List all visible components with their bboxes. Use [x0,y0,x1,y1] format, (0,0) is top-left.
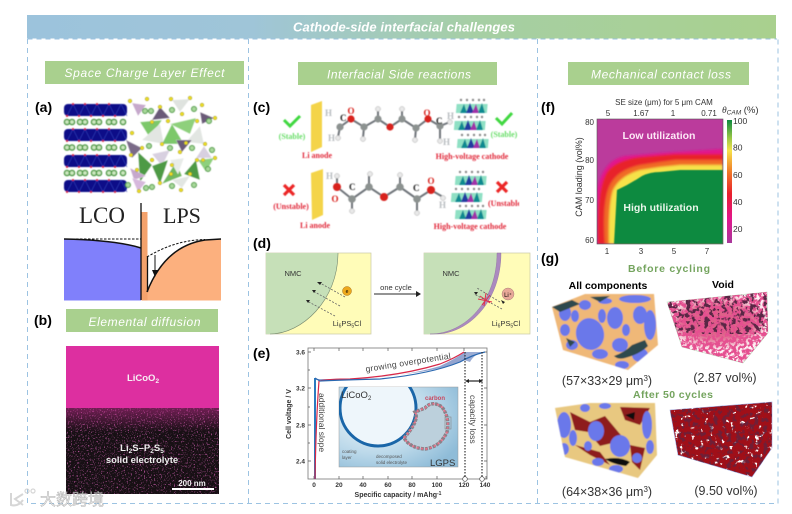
label: void: Void [712,279,734,291]
utilization heat map: 7 [705,247,710,256]
icon: cross [497,182,507,192]
stable electrolyte molecule: H [447,111,454,121]
utilization heat map [574,98,759,256]
after cycle panel: 6 [498,324,501,330]
3D volume: all components after cycling [555,403,657,478]
arrow: one cycle: one cycle [380,283,412,292]
heading: mechanical contact loss [568,62,749,85]
caption: (9.50 vol%) [694,484,758,498]
heading: after 50 cycles: After 50 cycles [633,389,713,401]
voltage profile chart: 0 [312,482,316,489]
EDS map image: 2 [129,448,133,455]
watermark: 大数跨境 [40,490,104,509]
before cycle panel: e [346,289,349,295]
colour bar: 100 [733,116,747,126]
crystal structure illustration [64,96,217,193]
colour bar [722,105,759,243]
heading: elemental diffusion: Elemental diffusion [88,315,201,329]
stable electrolyte molecule: H [443,137,450,147]
utilization heat map: 3 [639,247,644,256]
EDS map image: 2 [150,448,154,455]
tomography panels [552,263,775,499]
voltage profile chart: 40 [359,482,367,489]
voltage profile chart: 120 [459,482,470,489]
utilization heat map: 80 [585,118,595,127]
unstable electrolyte molecule: C [349,182,356,192]
before cycle panel: Cl [354,319,362,328]
panel: space charge layer [35,61,244,300]
caption: (64×38×36 μm [562,485,643,499]
EDS map image [66,346,219,494]
voltage profile chart: 60 [384,482,392,489]
unstable electrolyte molecule: C [413,183,420,193]
3D volume: all components before cycling [552,294,658,370]
inset: interface schematic: solid electrolyte [376,460,408,465]
inset: interface schematic: decomposed [376,454,402,459]
EDS map image: S–P [132,443,151,454]
EDS map image: solid electrolyte [106,455,178,466]
after cycle panel: Li [492,319,498,328]
utilization heat map: 1 [605,247,610,256]
after cycle panel: NMC [442,269,460,278]
caption: (57×33×29 μm [562,374,643,388]
capacity loss marker [463,352,484,481]
unstable electrolyte molecule [273,169,524,231]
utilization heat map: 5 [672,247,677,256]
voltage profile chart: 100 [432,482,443,489]
colour bar: 60 [733,170,743,180]
inset: interface schematic: carbon [425,396,445,402]
utilization heat map: 70 [585,196,595,205]
voltage profile chart: 20 [335,482,343,489]
heading: interfacial side reactions [298,62,497,85]
voltage profile chart: 2.8 [296,422,305,430]
label e: (e) [253,345,270,361]
heading: before cycling: Before cycling [628,263,710,275]
voltage profile chart: 2.4 [296,458,305,466]
utilization heat map: 60 [585,236,595,245]
colour bar: 80 [733,142,743,152]
inset: interface schematic: layer [342,455,352,460]
unstable electrolyte molecule: (Unstable) [488,199,524,208]
before cycle panel: 5 [351,324,354,330]
inset: interface schematic: LGPS [430,458,455,469]
caption: 3 [643,485,648,494]
watermark [11,489,104,509]
label: all components: All components [569,280,648,292]
unstable electrolyte molecule: (Unstable) [273,202,309,211]
colour bar: θ [722,106,727,116]
after cycle panel [424,253,530,334]
utilization heat map: 0.71 [701,109,717,118]
stable electrolyte molecule: (Stable) [491,130,518,139]
unstable electrolyte molecule: H [326,171,333,181]
stable electrolyte molecule: C [436,116,442,126]
unstable electrolyte molecule: High-voltage cathode [434,222,507,231]
stable electrolyte molecule [279,99,518,161]
EDS map image: 2 [155,378,159,385]
stable electrolyte molecule: Li anode [302,151,332,160]
stable electrolyte molecule: C [340,113,346,123]
before cycle panel [266,253,371,334]
stable electrolyte molecule: O [423,108,431,118]
utilization heat map: 1 [671,109,676,118]
stable electrolyte molecule: High-voltage cathode [436,152,509,161]
band diagram [64,203,221,300]
voltage profile chart: 3.6 [296,350,305,356]
stable electrolyte molecule: O [347,106,355,116]
label a: (a) [35,99,52,115]
heading: mechanical contact loss: Mechanical contact loss [591,68,731,82]
arrow: one cycle [374,283,421,297]
capacity loss marker: capacity loss [468,395,478,444]
labels LCO and LPS: LCO [79,203,125,228]
utilization heat map: CAM loading (vol%) [574,137,584,217]
panel: mechanical contact loss [541,62,775,499]
label g: (g) [541,250,559,266]
caption: ) [648,374,652,388]
after cycle panel: Cl [513,319,521,328]
labels LCO and LPS [79,203,201,228]
icon: cross [284,185,294,195]
3D volume: void before cycling [665,290,770,365]
unstable electrolyte molecule: O [331,194,339,204]
after cycle panel: PS [500,319,510,328]
colour bar: 20 [733,224,743,234]
title banner [27,15,776,38]
title banner: Cathode-side interfacial challenges [293,20,515,34]
panel: elemental diffusion [34,309,219,494]
icon: check mark [284,116,300,126]
inset: interface schematic: coating [342,449,357,454]
inset: interface schematic: LiCoO [341,390,368,401]
caption: 3 [643,374,648,383]
label d: (d) [253,235,271,251]
labels LCO and LPS: LPS [163,203,201,228]
utilization heat map: 80 [585,156,595,165]
EDS map image: 5 [160,448,164,455]
colour bar: (%) [741,105,759,116]
voltage profile chart: Cell voltage / V [286,389,293,439]
unstable electrolyte molecule: Li anode [300,221,330,230]
caption: ) [648,485,652,499]
utilization heat map: 5 [606,109,611,118]
voltage profile chart: 3.2 [296,386,305,392]
voltage profile chart: additional slope [317,393,327,452]
utilization heat map: SE size (μm) for 5 μm CAM [615,98,713,107]
heading: interfacial side reactions: Interfacial Side reactions [327,68,471,82]
utilization heat map: 1.67 [633,109,649,118]
heading: space charge layer effect: Space Charge Layer Effect [64,66,225,80]
colour bar: CAM [727,110,742,116]
voltage profile chart [286,348,491,499]
before cycle panel: Li [333,319,339,328]
voltage profile chart: -1 [437,491,442,497]
label f: (f) [541,99,555,115]
voltage profile chart: 140 [480,482,491,489]
utilization heat map: Low utilization [623,130,695,142]
caption: (2.87 vol%) [693,371,757,385]
voltage profile chart: Specific capacity / mAhg [355,492,437,499]
EDS map image: LiCoO [127,373,155,384]
stable electrolyte molecule: H [325,108,332,118]
before cycle panel: PS [341,319,351,328]
label c: (c) [253,99,270,115]
utilization heat map: High utilization [623,202,699,214]
stable electrolyte molecule: (Stable) [279,132,306,141]
panel: interfacial side reactions [253,62,530,499]
EDS map image: Li [120,443,129,454]
unstable electrolyte molecule: H [439,200,446,210]
before cycle panel: 6 [339,324,342,330]
EDS map image: 200 nm [178,479,206,488]
3D volume: void after cycling [670,402,772,478]
unstable electrolyte molecule: O [427,176,435,186]
stable electrolyte molecule: H [328,133,335,143]
colour bar: 40 [733,197,743,207]
voltage profile chart: 80 [408,482,416,489]
inset: interface schematic: 2 [368,396,372,402]
heading: elemental diffusion [66,309,218,332]
voltage profile chart: growing overpotential [365,351,451,374]
NMC interface schematic [266,253,530,334]
before cycle panel: NMC [284,269,302,278]
after cycle panel: Li⁺ [504,292,512,299]
EDS map image: S [154,443,160,454]
inset: interface schematic [338,386,458,468]
label b: (b) [34,312,52,328]
icon: check mark [496,113,512,124]
after cycle panel: 5 [510,324,513,330]
heading: space charge layer effect [45,61,244,84]
